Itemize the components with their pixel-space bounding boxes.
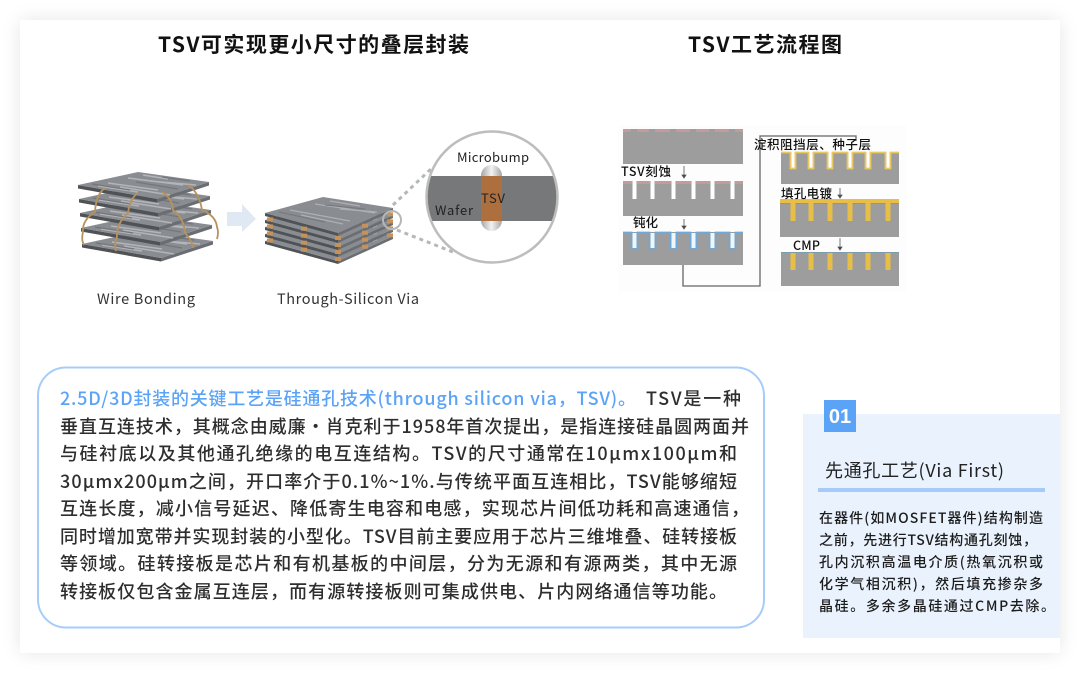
paragraph text: 2.5D/3D封装的关键工艺是硅通孔技术(through silicon via，TSV)。 [60,385,636,411]
small step arrows [682,166,842,250]
label: Wafer: Wafer [435,200,474,219]
step labels: 钝化 [633,212,658,231]
paragraph text: 垂直互连技术，其概念由威廉·肖克利于1958年首次提出，是指连接硅晶圆两面并 [60,413,749,439]
arrow: wire bonding to TSV [227,204,256,232]
paragraph text: 30μmx200μm之间，开口率介于0.1%~1%.与传统平面互连相比，TSV能够缩短 [60,468,737,494]
panel: key process description [38,368,764,628]
paragraph text: 同时增加宽带并实现封装的小型化。TSV目前主要应用于芯片三维堆叠、硅转接板 [60,523,737,549]
panel body text: 在器件(如MOSFET器件)结构制造 [819,508,1043,528]
panel body text: 晶硅。多余多晶硅通过CMP去除。 [819,596,1055,616]
paragraph text [60,385,749,604]
step 2: TSV etch [623,181,743,216]
label: TSV: TSV [481,188,506,207]
panel body text: 孔内沉积高温电介质(热氧沉积或 [819,552,1043,572]
step labels: TSV刻蚀 [621,161,671,180]
title: TSV process flow: TSV工艺流程图 [688,29,842,59]
magnifier: wafer cross section [420,132,560,262]
paragraph text: 等领域。硅转接板是芯片和有机基板的中间层，分为无源和有源两类，其中无源 [60,550,737,576]
caption: Wire Bonding: Wire Bonding [97,288,195,309]
panel heading: 先通孔工艺(Via First) [825,457,1004,483]
step 3: passivation [623,232,743,265]
step 4: barrier and seed layer [781,152,899,184]
connector line [683,136,856,286]
step labels: CMP [793,235,820,254]
process diagram [618,125,906,292]
paragraph text: TSV是一种 [646,385,741,411]
paragraph text: 转接板仅包含金属互连层，而有源转接板则可集成供电、片内网络通信等功能。 [60,578,727,604]
label: Microbump: Microbump [457,147,529,166]
illustration: TSV stack [265,197,393,264]
badge 01: 01 [829,406,851,428]
paragraph text: 与硅衬底以及其他通孔绝缘的电互连结构。TSV的尺寸通常在10μmx100μm和 [60,440,737,466]
step labels: 淀积阻挡层、种子层 [754,134,871,153]
step 5: via plating [780,199,899,237]
step 6: CMP [781,252,899,286]
panel body text [819,508,1055,616]
heading underline [818,488,1045,492]
magnifier: small ring and dotted leaders [383,167,453,252]
paragraph text: 互连长度，减小信号延迟、降低寄生电容和电感，实现芯片间低功耗和高速通信， [60,495,749,521]
badge 01 [824,400,856,432]
panel: via first [803,400,1060,638]
caption: Through-Silicon Via: Through-Silicon Via [277,288,419,309]
panel body text: 化学气相沉积)，然后填充掺杂多 [819,574,1043,594]
panel body text: 之前，先进行TSV结构通孔刻蚀， [819,530,1037,550]
step 1: wafer [623,129,743,164]
illustration: wire bonding stack [78,172,218,262]
step labels [621,134,871,254]
title: stacked packaging: TSV可实现更小尺寸的叠层封装 [158,29,469,59]
step labels: 填孔电镀 [781,183,832,202]
